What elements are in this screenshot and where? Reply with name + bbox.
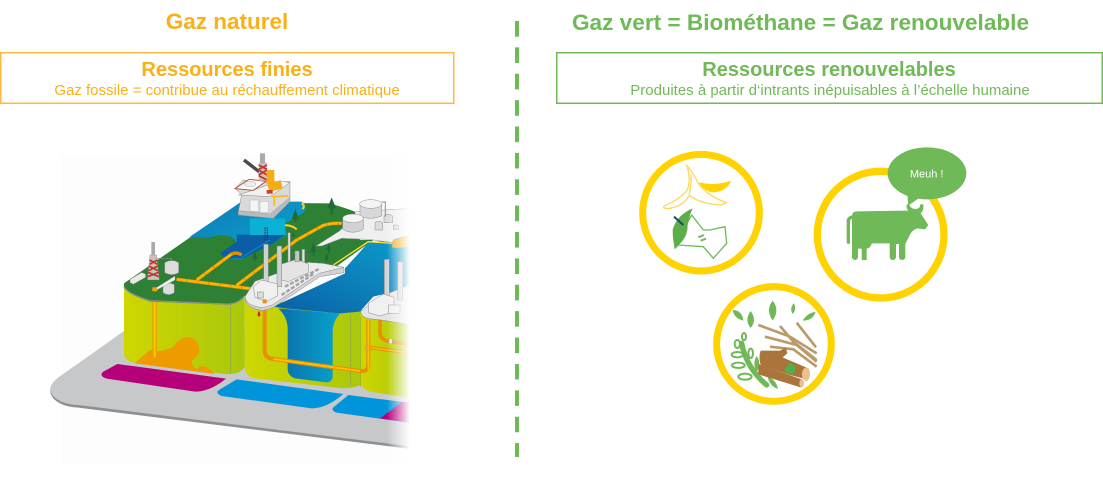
lagoon [190,202,305,259]
green land [124,203,373,305]
box: ressources finies [1,53,454,103]
title: gaz vert: Gaz vert = Biométhane = Gaz renouvelable [572,10,1029,35]
pipelines [177,223,342,289]
circle: green waste [717,287,831,401]
trees [252,197,336,262]
icon: banana peel [664,165,730,209]
block 1 [124,285,245,374]
offshore platform [235,153,290,240]
resources icons [643,147,966,401]
heading: ressources renouvelables: Ressources renouvelables [702,59,956,81]
speech bubble: Meuh: Meuh ! [910,168,943,180]
blue pad 1 [217,379,343,408]
power plant 2 [361,259,413,325]
pipe [265,302,368,371]
circle: food waste [643,154,759,271]
icon: apple core [673,208,727,258]
base slab [50,327,413,449]
title: Gaz naturel: Gaz naturel [166,9,288,34]
magenta pad [101,364,226,392]
pipe head 2 [259,299,271,303]
heading: ressources finies: Ressources finies [141,59,313,81]
dashed divider [515,21,519,457]
main water [273,237,413,313]
icon: leaves [733,301,816,389]
speech bubble: Meuh [888,147,966,206]
storage plant [316,200,413,248]
well pipe [148,287,161,357]
illustration: natural gas infrastructure [50,140,423,477]
blue pad 2 with magenta [333,395,413,423]
block 3 [361,310,413,398]
icon: branch [732,333,767,385]
icon: logs and twigs [758,323,817,387]
icon: cow [847,204,928,260]
power plant 1 [245,233,344,311]
box: ressources renouvelables [557,53,1102,103]
onshore well [130,242,179,295]
text: gaz fossile: Gaz fossile = contribue au réchauffement climatique [54,82,400,99]
block 2 [245,300,368,388]
gas reservoir [135,337,215,374]
water cutaway [278,308,340,382]
small red arrow [257,312,261,317]
circle: cow [817,171,944,298]
right fade [387,140,410,477]
text: intrants: Produites à partir d‘intrants inépuisables à l’échelle humaine [630,82,1030,99]
